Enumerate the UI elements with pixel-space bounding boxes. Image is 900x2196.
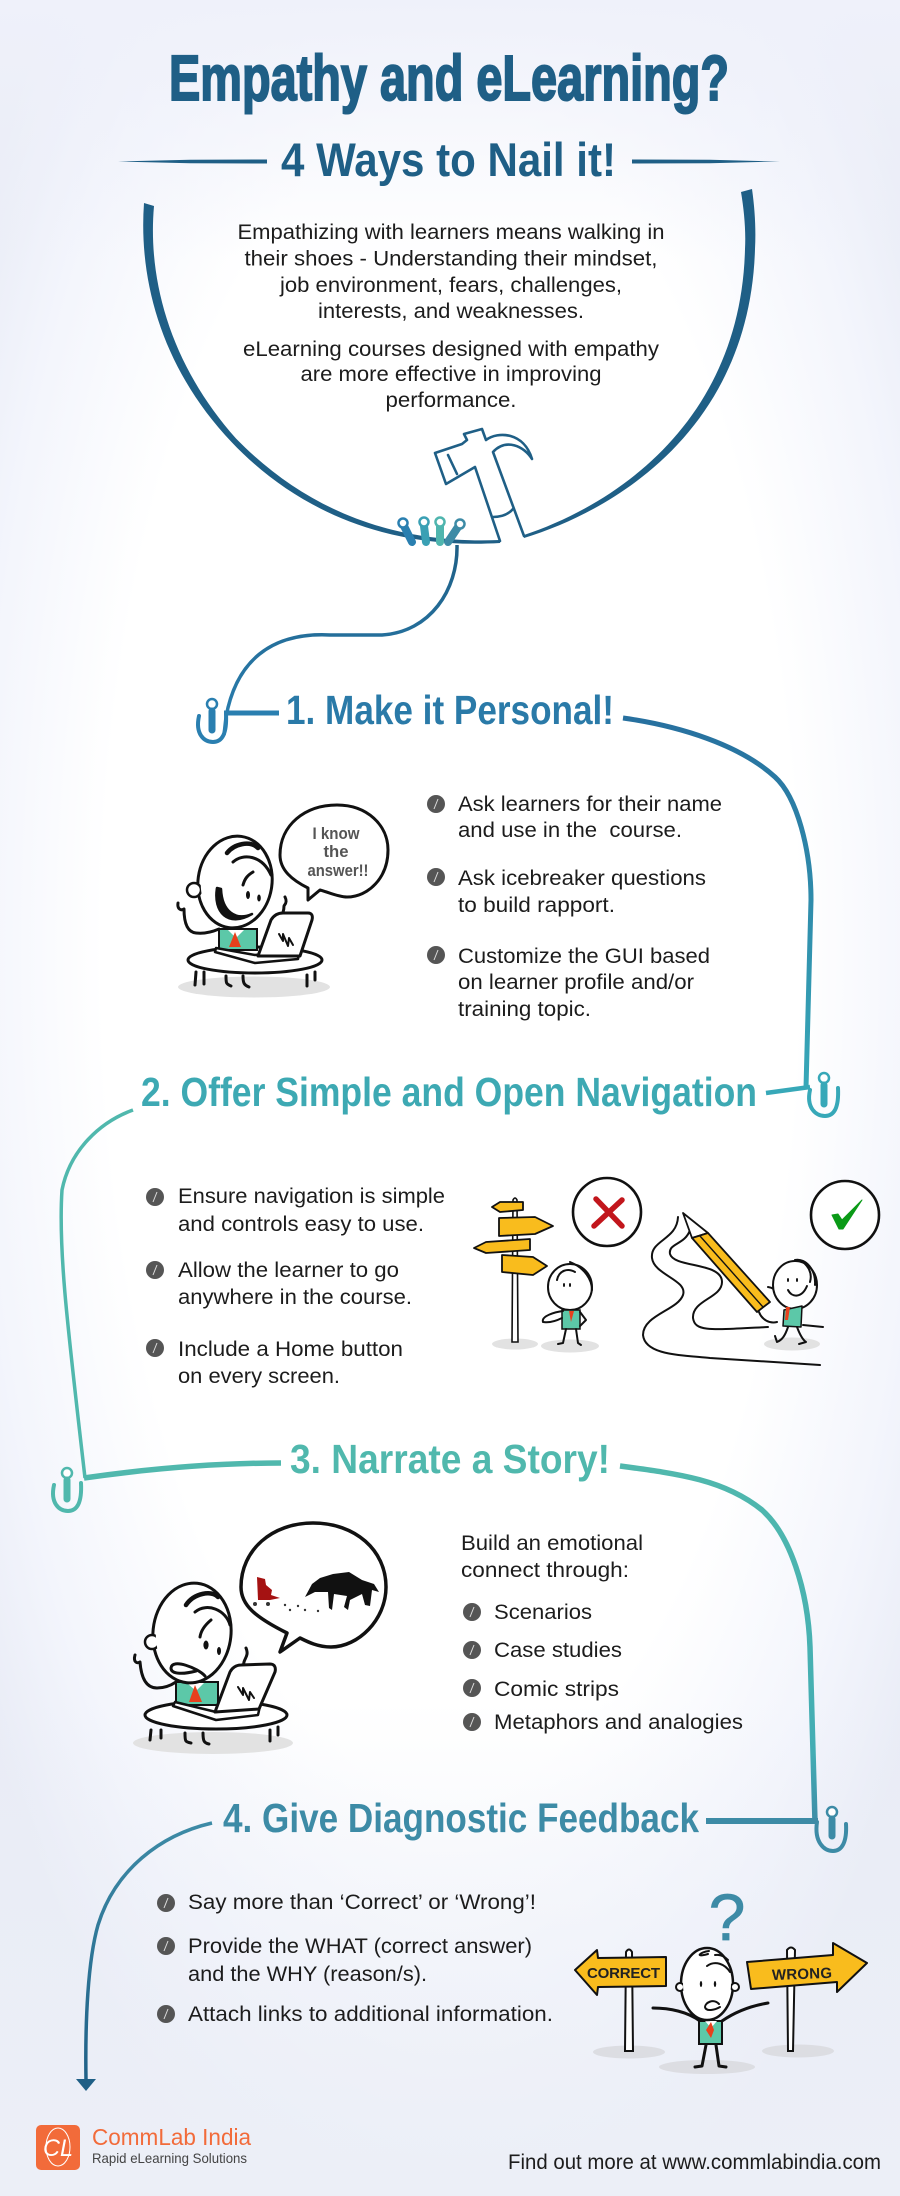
connector: hook 4 to heading 4: [706, 1818, 818, 1824]
icon: wolf: [305, 1572, 379, 1610]
bullet 1: Ensure navigation is simple: [178, 1185, 445, 1208]
text: story intro: Build an emotional: [461, 1532, 643, 1555]
heading: step 2: 2. Offer Simple and Open Navigation: [141, 1069, 757, 1115]
footer: website note: Find out more at www.commlabindia.com: [508, 2151, 881, 2174]
semicircle bowl: [143, 189, 755, 544]
intro text: Empathizing with learners means walking in: [238, 221, 664, 244]
bullets: step 4: [157, 1891, 553, 2026]
question mark: ?: [709, 1880, 745, 1954]
bullet 3: Customize the GUI based: [458, 945, 710, 968]
illustration: happy learner with laptop: [178, 805, 388, 998]
illustration: confusing signpost with X: [474, 1178, 641, 1352]
speech bubble: the: [324, 842, 348, 861]
bullet 1: Ask learners for their name: [458, 793, 722, 816]
arrow: step 4 to footer: [76, 1823, 212, 2091]
icon: hook 1: [198, 699, 226, 742]
subtitle with side rules: [118, 133, 780, 186]
sign: correct: CORRECT: [587, 1965, 660, 1982]
bullet 2: [157, 1935, 532, 1986]
bullets: step 2: [146, 1185, 445, 1388]
bullet 3: Attach links to additional information.: [188, 2003, 553, 2026]
heading: step 4: 4. Give Diagnostic Feedback: [223, 1795, 699, 1841]
icon: hook 2: [809, 1073, 838, 1116]
subtitle with side rules: 4 Ways to Nail it!: [281, 133, 616, 186]
footer: logo: CommLab India: [92, 2124, 251, 2150]
icon: red riding hood: [257, 1577, 280, 1600]
bullet 2: [427, 867, 706, 917]
intro text: [238, 221, 664, 412]
icon: CL badge: [36, 2125, 80, 2170]
bullet 2: anywhere in the course.: [178, 1286, 412, 1309]
footer: logo: Rapid eLearning Solutions: [92, 2150, 247, 2166]
connector: heading 2 to hook 2: [766, 1087, 810, 1093]
bullet 3: on learner profile and/or: [458, 971, 694, 994]
icon: hook 4: [816, 1807, 846, 1851]
icon: CL badge: CL: [43, 2135, 73, 2162]
bullet 1: [146, 1185, 445, 1236]
illustration: winding road with pencil and check: [643, 1181, 879, 1365]
intro text: performance.: [386, 389, 516, 412]
speech bubble: answer!!: [308, 861, 368, 880]
bullet 1: and use in the course.: [458, 819, 682, 842]
speech bubble: I know: [312, 824, 360, 843]
intro text: interests, and weaknesses.: [318, 300, 584, 323]
connector: heading 3 to hook 4: [620, 1466, 815, 1822]
bullet 1: Say more than ‘Correct’ or ‘Wrong’!: [188, 1891, 536, 1914]
intro text: job environment, fears, challenges,: [279, 274, 622, 297]
connector: hook 1 to heading 1: [224, 710, 279, 716]
bullet 2: Provide the WHAT (correct answer): [188, 1935, 532, 1958]
icon: hook 3: [53, 1468, 81, 1511]
bullet 3: Include a Home button: [178, 1338, 403, 1361]
text: story intro: [461, 1532, 643, 1582]
sign: correct: [575, 1950, 666, 1995]
connector: hook 3 to heading 3: [84, 1463, 281, 1478]
illustration: learner thinking of a story: [133, 1523, 386, 1754]
bullet 1: Scenarios: [494, 1601, 592, 1624]
connector: heading 1 to hook 2: [623, 718, 811, 1088]
bullet 1: and controls easy to use.: [178, 1213, 424, 1236]
bullet 2: and the WHY (reason/s).: [188, 1963, 427, 1986]
icon: four nails: [398, 518, 464, 542]
intro text: their shoes - Understanding their mindset,: [244, 248, 658, 270]
sign: wrong: WRONG: [772, 1965, 832, 1984]
bullet 2: to build rapport.: [458, 894, 615, 917]
bullet 1: [427, 793, 722, 842]
intro text: are more effective in improving: [300, 363, 602, 386]
connector: heading 2 to hook 3: [61, 1110, 133, 1478]
speech bubble: [280, 805, 388, 900]
text: story intro: connect through:: [461, 1559, 629, 1582]
footer: logo: [36, 2124, 251, 2170]
thought bubble: [241, 1523, 386, 1652]
illustration: correct or wrong signs: [575, 1880, 867, 2074]
connector: intro to step 1: [224, 545, 457, 735]
bullet 3: training topic.: [458, 998, 591, 1021]
bullet 3: [427, 945, 710, 1021]
heading: step 1: 1. Make it Personal!: [286, 687, 614, 733]
bullet 2: Ask icebreaker questions: [458, 867, 706, 890]
bullets: step 3: [463, 1601, 743, 1734]
bullet 2: [146, 1259, 412, 1309]
bullet 2: Case studies: [494, 1639, 622, 1662]
bullet 2: Allow the learner to go: [178, 1259, 399, 1282]
bullets: step 1: [427, 793, 722, 1021]
bullet 3: on every screen.: [178, 1365, 340, 1388]
icon: hammer: [435, 429, 532, 541]
bullet 4: Metaphors and analogies: [494, 1711, 743, 1734]
sign: wrong: [747, 1943, 867, 1992]
bullet 3: Comic strips: [494, 1678, 619, 1701]
bullet 3: [146, 1338, 403, 1388]
intro text: eLearning courses designed with empathy: [243, 338, 660, 361]
heading: step 3: 3. Narrate a Story!: [290, 1436, 610, 1482]
